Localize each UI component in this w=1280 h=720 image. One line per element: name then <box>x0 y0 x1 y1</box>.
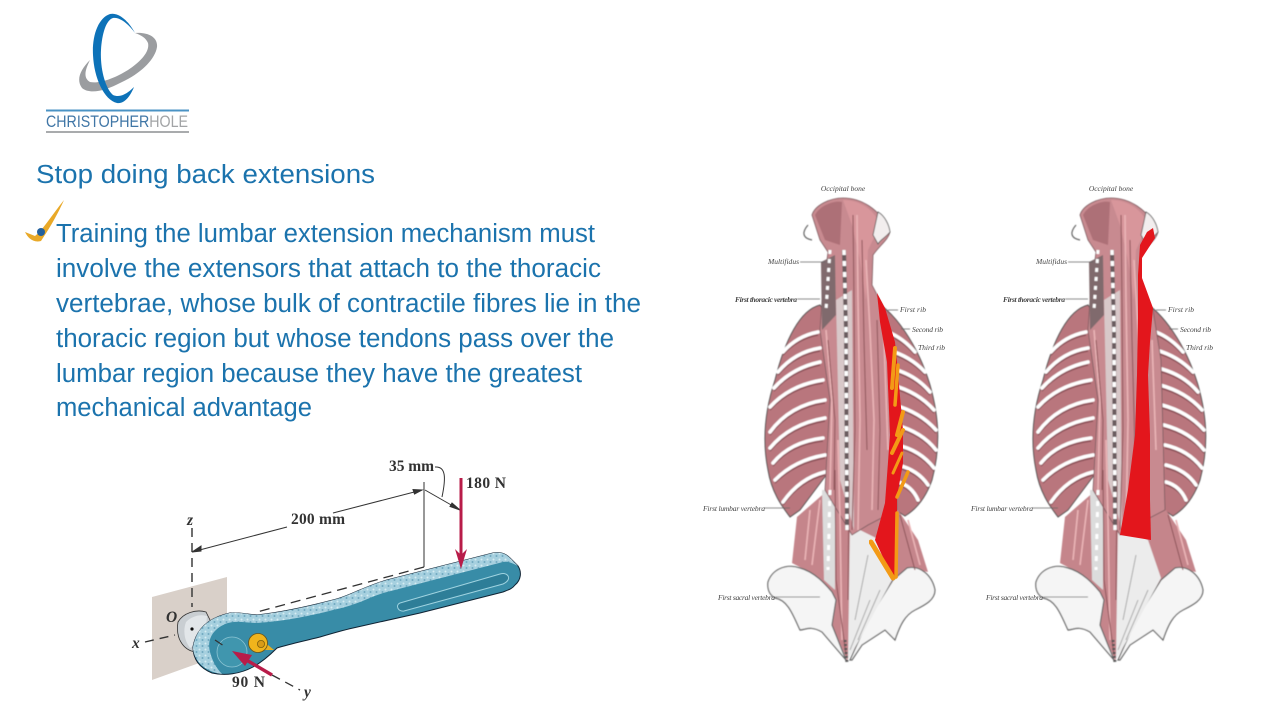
anatomy labels, left: First thoracic vertebra <box>735 295 797 304</box>
diagram labels: x <box>131 635 140 652</box>
anatomy labels, left: Second rib <box>912 325 943 334</box>
anatomy labels, right: First lumbar vertebra <box>970 504 1033 513</box>
logo swoosh: grey ring <box>79 33 157 91</box>
anatomy labels, left: First lumbar vertebra <box>702 504 765 513</box>
anatomy labels, right: First sacral vertebra <box>985 593 1043 602</box>
dimension lines <box>192 467 460 612</box>
anatomy labels, right: Third rib <box>1186 343 1213 352</box>
red muscle with orange tendons <box>871 293 908 578</box>
hub cylinder <box>177 611 215 652</box>
anatomy figure: right, longissimus highlighted <box>970 184 1213 663</box>
anatomy labels, left: First rib <box>899 305 926 314</box>
back muscles illustration <box>1032 198 1206 663</box>
yellow knob <box>248 634 274 652</box>
logo swoosh: blue crescent <box>93 14 135 103</box>
logo <box>46 14 189 133</box>
body text block: involve the extensors that attach to the thoracic <box>56 255 601 283</box>
anatomy labels, left: Occipital bone <box>821 184 866 193</box>
anatomy labels, right: First thoracic vertebra <box>1003 295 1065 304</box>
body text block <box>56 220 641 422</box>
body text block: thoracic region but whose tendons pass over the <box>56 325 614 353</box>
anatomy labels, right: First rib <box>1167 305 1194 314</box>
diagram labels: 35 mm <box>389 458 434 475</box>
diagram labels: O <box>166 609 177 626</box>
anatomy figure: left, erector spinae with slips highlighted <box>702 184 945 663</box>
body text block: lumbar region because they have the greatest <box>56 360 582 388</box>
anatomy labels, left: First sacral vertebra <box>717 593 775 602</box>
wrench body <box>193 553 520 674</box>
anatomy labels, left: Multifidus <box>767 257 799 266</box>
wall plate <box>152 577 227 680</box>
anatomy labels, left: Third rib <box>918 343 945 352</box>
anatomy labels, right: Occipital bone <box>1089 184 1134 193</box>
body text block: mechanical advantage <box>56 394 312 422</box>
heading: Stop doing back extensions <box>36 161 375 189</box>
diagram labels: y <box>302 684 311 701</box>
anatomy labels, right: Second rib <box>1180 325 1211 334</box>
back muscles illustration <box>764 198 938 663</box>
anatomy labels, right <box>970 184 1213 602</box>
z and x axes <box>145 528 192 642</box>
diagram labels: z <box>186 512 193 529</box>
y axis <box>215 640 300 690</box>
diagram labels: 180 N <box>466 475 506 492</box>
force arrow: 90 N <box>232 651 272 675</box>
diagram labels: 200 mm <box>291 511 345 528</box>
icon: check mark bullet <box>25 200 64 241</box>
logo rules and wordmark: CHRISTOPHERHOLE <box>46 113 188 131</box>
anatomy labels, left <box>702 184 945 602</box>
force arrow: 180 N <box>455 478 467 569</box>
anatomy labels, right: Multifidus <box>1035 257 1067 266</box>
body text block: vertebrae, whose bulk of contractile fibres lie in the <box>56 290 641 318</box>
red muscle <box>1120 228 1155 540</box>
diagram labels: 90 N <box>232 674 265 691</box>
body text block: Training the lumbar extension mechanism must <box>56 220 595 248</box>
wrench force diagram <box>131 458 520 701</box>
diagram labels <box>131 458 506 701</box>
